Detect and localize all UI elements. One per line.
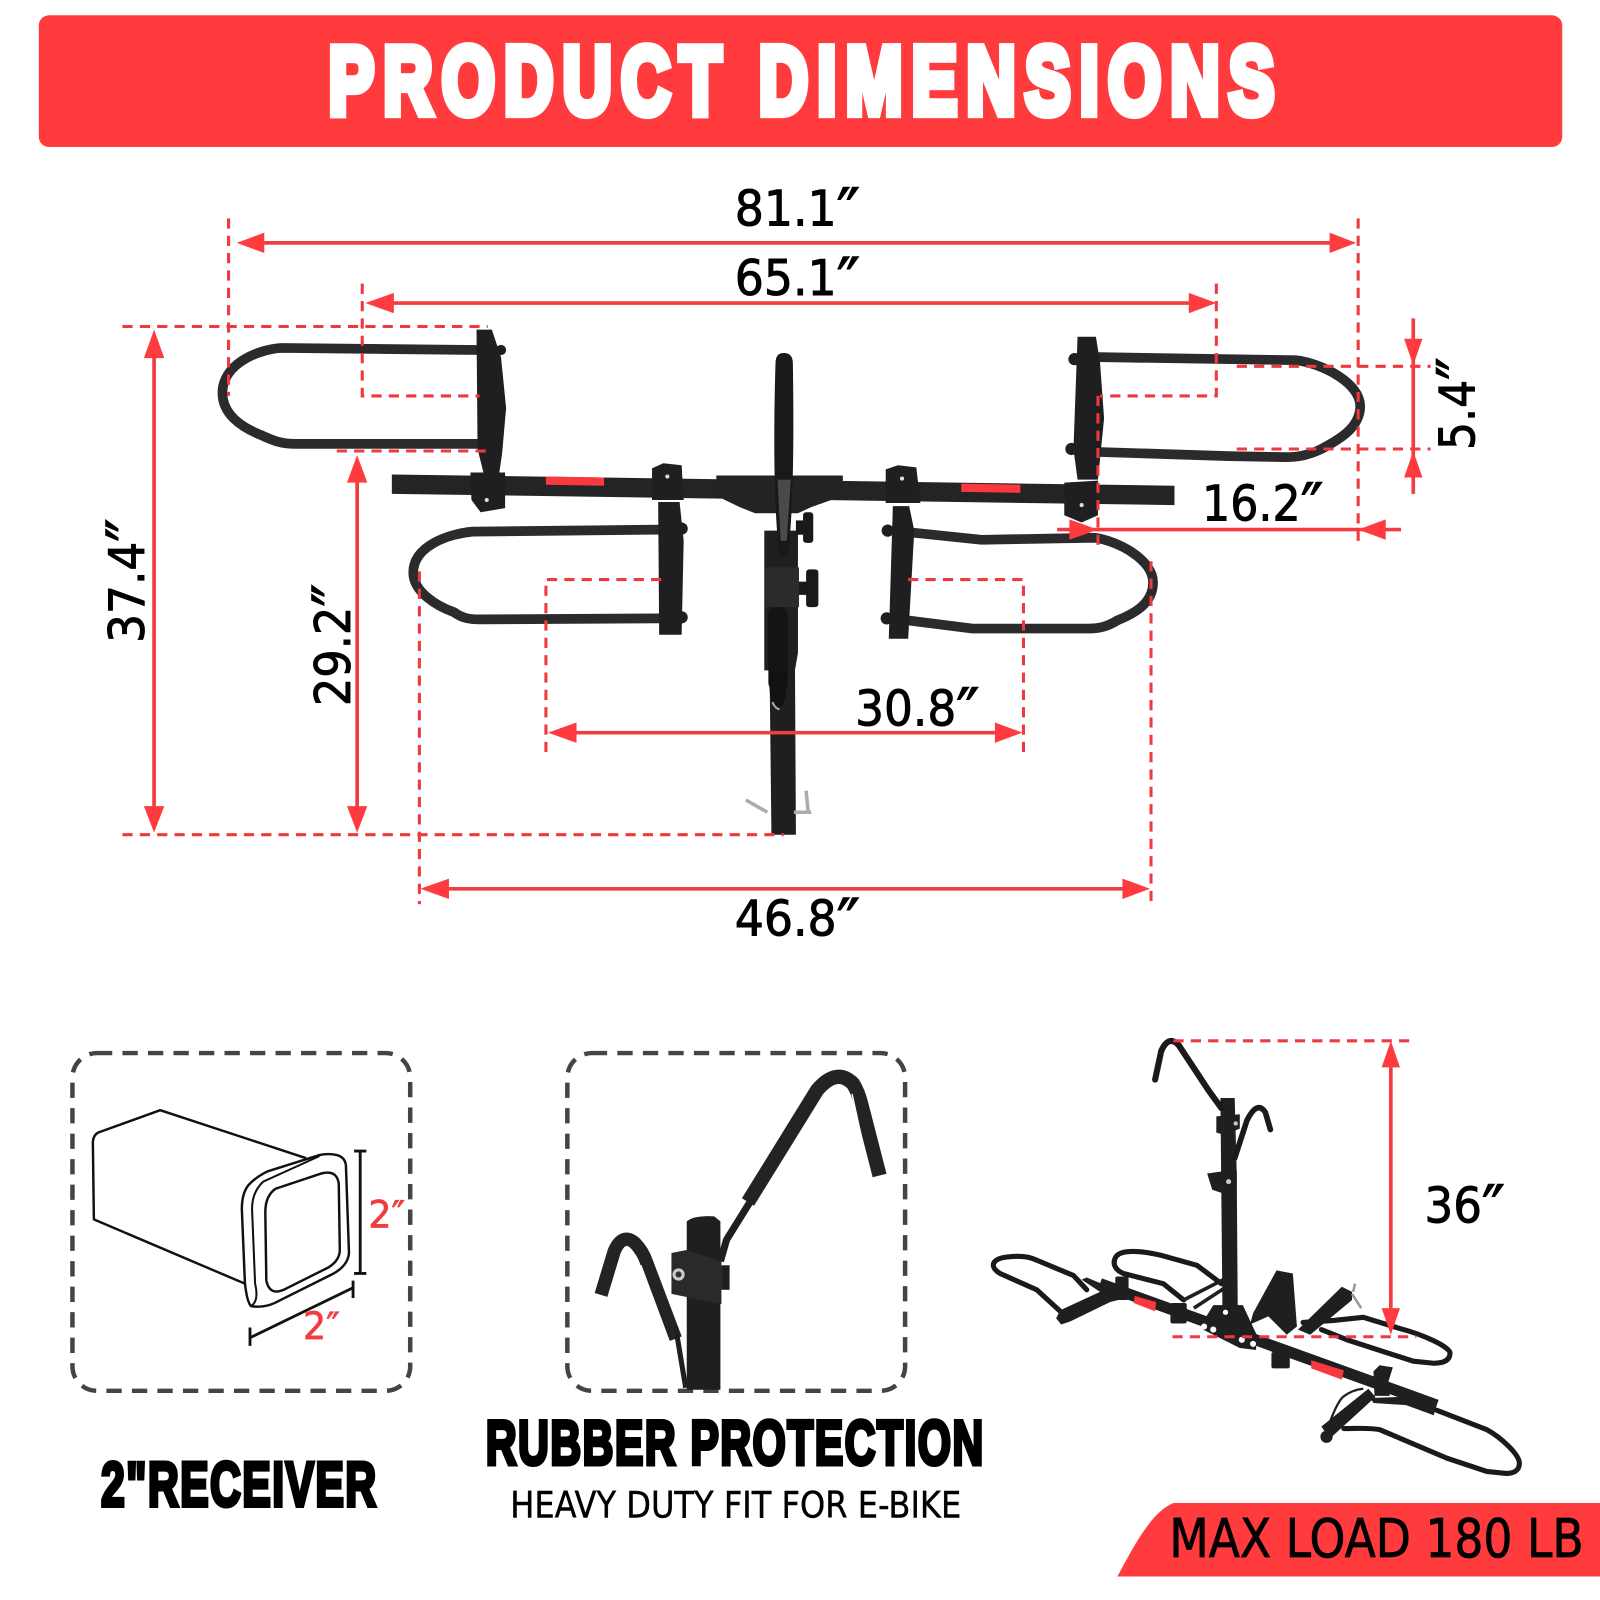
dimension: 81.1 inch overall width <box>229 174 1358 547</box>
dimension: 16.2 inch: 16.2 <box>1202 475 1311 532</box>
hitch pin <box>1352 1284 1361 1308</box>
dimension: 36 inch height <box>1172 1041 1505 1337</box>
centre plates <box>1201 1305 1256 1350</box>
near front hoop <box>1344 1410 1519 1473</box>
width marker <box>250 1281 353 1346</box>
centre mast and hitch tube <box>746 353 818 835</box>
upper left wheel hoop <box>222 330 506 482</box>
dimension: 29.2 inch: 29.2 <box>305 597 362 706</box>
dimension: 65.1 inch: ″ <box>837 243 860 322</box>
heading: 2 inch receiver: 2"RECEIVER <box>101 1450 378 1520</box>
lower left wheel hoop <box>413 502 688 635</box>
dimension: 5.4 inch: 5.4 <box>1429 372 1486 450</box>
dimension: 37.4 inch overall depth: 37.4 <box>99 534 156 643</box>
dimension: 37.4 inch overall depth: ″ <box>92 518 171 542</box>
panel: 2 inch receiver <box>72 1053 410 1391</box>
near arm and clamp <box>1320 1365 1437 1443</box>
upper hook <box>1155 1041 1221 1108</box>
main crossbar <box>392 474 1174 505</box>
dimension: 81.1 inch overall width: 81.1 <box>735 181 844 238</box>
large hook rubber sleeve <box>748 1077 880 1202</box>
dimension: 46.8 inch <box>419 561 1151 963</box>
lower hook <box>1235 1108 1270 1158</box>
clamps on mast <box>1207 1114 1240 1194</box>
centre plate <box>716 476 843 513</box>
main bar <box>1100 1284 1437 1405</box>
red reflector left <box>546 477 604 486</box>
folded plate <box>1250 1270 1297 1335</box>
upper right wheel hoop <box>1065 337 1360 480</box>
mast <box>1220 1098 1238 1311</box>
red reflector right <box>961 484 1020 493</box>
large hook arm <box>720 1202 750 1261</box>
mast post <box>687 1216 720 1390</box>
dimension: 81.1 inch overall width: ″ <box>837 174 860 253</box>
dimension: 30.8 inch: ″ <box>956 674 980 753</box>
near back hoop <box>1303 1317 1450 1363</box>
dimension: 46.8 inch: ″ <box>837 884 860 963</box>
bike rack top view <box>222 330 1360 835</box>
far left hoop <box>993 1256 1087 1311</box>
crossbar clamps <box>470 463 1098 522</box>
clamp bracket <box>671 1250 730 1304</box>
hitch tube <box>1298 1287 1352 1335</box>
panel: rubber protection <box>567 1053 905 1391</box>
hook highlights <box>641 1094 869 1342</box>
reflector near <box>1311 1360 1344 1380</box>
reflector far <box>1134 1296 1156 1311</box>
title banner <box>39 15 1562 147</box>
dimension: 36 inch height: 36 <box>1424 1177 1487 1234</box>
heading: rubber protection: RUBBER PROTECTION <box>486 1408 985 1478</box>
dimension: 46.8 inch: 46.8 <box>735 891 844 948</box>
dimension: 30.8 inch <box>546 580 1023 757</box>
width label: 2″ <box>303 1304 340 1348</box>
small hook arm <box>676 1327 686 1388</box>
dimension: 16.2 inch: ″ <box>1301 469 1323 548</box>
height marker <box>354 1151 366 1273</box>
dimension: 65.1 inch: 65.1 <box>735 250 844 307</box>
subheading: heavy duty: HEAVY DUTY FIT FOR E-BIKE <box>510 1483 961 1526</box>
receiver tube drawing <box>93 1110 349 1307</box>
dimension: 29.2 inch <box>298 451 488 833</box>
left bar clamp <box>1115 1277 1129 1300</box>
middle clamps and struts <box>1170 1280 1290 1368</box>
dimension: 37.4 inch overall depth <box>92 327 784 835</box>
small hook rubber sleeve <box>601 1239 676 1339</box>
dimension: 65.1 inch <box>362 243 1216 396</box>
dimension: 5.4 inch: ″ <box>1423 357 1502 380</box>
left arm bracket <box>1056 1278 1127 1324</box>
back hoop <box>1114 1251 1221 1300</box>
dimension: 29.2 inch: ″ <box>298 584 377 607</box>
dimension: 30.8 inch: 30.8 <box>855 681 964 738</box>
height label: 2″ <box>368 1193 405 1237</box>
bike rack perspective view <box>993 1041 1519 1473</box>
lower right wheel hoop <box>881 506 1153 639</box>
dimension: 5.4 inch <box>1237 318 1502 494</box>
dimension: 36 inch height: ″ <box>1482 1171 1505 1250</box>
dimension: 16.2 inch <box>1057 396 1401 548</box>
